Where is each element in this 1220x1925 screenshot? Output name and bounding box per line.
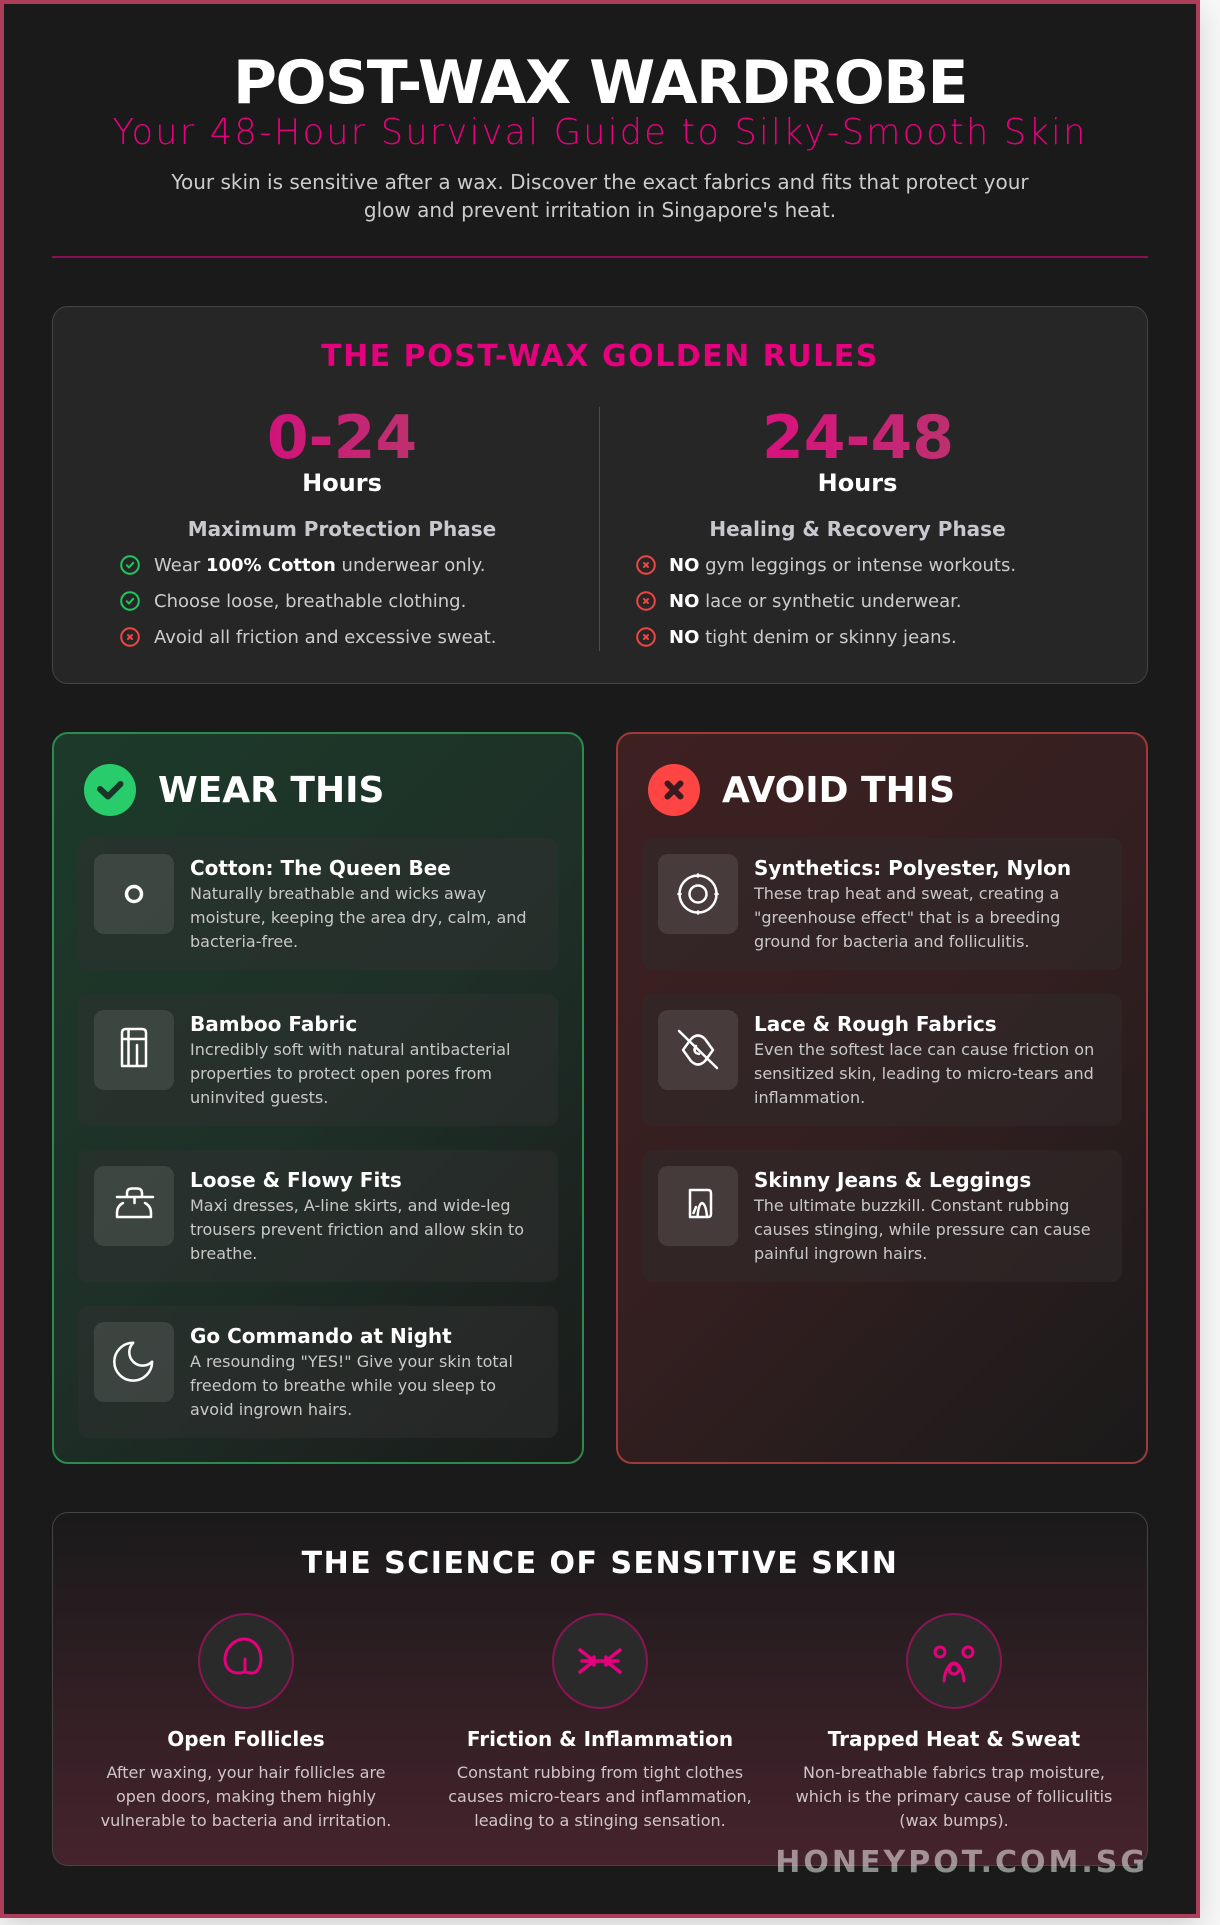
text: open follicles — [101, 1763, 391, 1830]
text: trapped heat: Non-breathable fabrics trap moisture, — [803, 1763, 1105, 1782]
rules list — [636, 554, 1016, 648]
column: trapped heat — [796, 1613, 1112, 1830]
text: synthetics — [754, 856, 1071, 951]
rule: cotton: Wear 100% Cotton underwear only. — [154, 554, 485, 576]
label: hours: Hours — [818, 469, 897, 497]
text: cotton: Cotton: The Queen Bee — [190, 856, 451, 880]
heading: wear this: WEAR THIS — [158, 770, 384, 811]
text: synthetics: These trap heat and sweat, creating a — [754, 884, 1059, 903]
text: open follicles: vulnerable to bacteria and irritation. — [101, 1811, 391, 1830]
panel: golden rules — [52, 306, 1148, 684]
text: skinny jeans: causes stinging, while pressure can cause — [754, 1220, 1091, 1239]
phase name: Healing & Recovery Phase — [709, 517, 1006, 541]
text: cotton: moisture, keeping the area dry, calm, and — [190, 908, 527, 927]
text: friction — [448, 1763, 752, 1830]
text: skinny jeans: painful ingrown hairs. — [754, 1244, 927, 1263]
text: loose fits: trousers prevent friction and allow skin to — [190, 1220, 524, 1239]
text: cotton: bacteria-free. — [190, 932, 298, 951]
column: 0-24 hours — [120, 403, 497, 648]
text: bamboo: Bamboo Fabric — [190, 1012, 357, 1036]
column: 24-48 hours — [636, 403, 1016, 648]
text: synthetics: ground for bacteria and folliculitis. — [754, 932, 1029, 951]
text: loose fits — [190, 1168, 524, 1263]
heading: science: THE SCIENCE OF SENSITIVE SKIN — [302, 1546, 898, 1581]
big number: 24-48 — [600, 403, 1116, 473]
text: bamboo: Incredibly soft with natural antibacterial — [190, 1040, 510, 1059]
text: trapped heat: (wax bumps). — [899, 1811, 1009, 1830]
text: trapped heat — [796, 1763, 1112, 1830]
big number: 0-24: 0-24 — [267, 403, 417, 473]
intro text: Your skin is sensitive after a wax. Discover the exact fabrics and fits that protect your — [171, 170, 1029, 194]
phase name: Maximum Protection Phase — [188, 517, 496, 541]
rule: no tight denim: NO tight denim or skinny jeans. — [669, 626, 957, 648]
text: commando — [190, 1324, 513, 1419]
text: commando: avoid ingrown hairs. — [190, 1400, 352, 1419]
text: skinny jeans — [754, 1168, 1091, 1263]
icon: bamboo — [94, 1010, 174, 1090]
text: loose fits: Maxi dresses, A-line skirts, and wide-leg — [190, 1196, 511, 1215]
text: loose fits: breathe. — [190, 1244, 257, 1263]
column: friction — [448, 1613, 752, 1830]
rule: no gym leggings: NO gym leggings or intense workouts. — [669, 554, 1016, 576]
text: open follicles: open doors, making them highly — [116, 1787, 376, 1806]
icon: red x — [648, 764, 700, 816]
heading: golden rules: THE POST-WAX GOLDEN RULES — [321, 339, 879, 374]
icon: cotton ring — [94, 854, 174, 934]
text: skinny jeans: Skinny Jeans & Leggings — [754, 1168, 1031, 1192]
column: open follicles — [101, 1613, 391, 1830]
text: bamboo — [190, 1012, 510, 1107]
text: lace — [754, 1012, 1094, 1107]
text: commando: A resounding "YES!" Give your skin total — [190, 1352, 513, 1371]
text: friction: causes micro-tears and inflammation, — [448, 1787, 752, 1806]
text: friction: leading to a stinging sensation. — [474, 1811, 726, 1830]
item: synthetics — [642, 838, 1122, 970]
text: cotton — [190, 856, 527, 951]
icon: friction — [552, 1613, 648, 1709]
subtitle: Your 48-Hour Survival Guide to Silky-Smooth Skin — [112, 112, 1088, 153]
big number: 0-24 — [84, 403, 600, 473]
item: commando — [78, 1306, 558, 1438]
icon: synthetics — [658, 854, 738, 934]
text: bamboo: uninvited guests. — [190, 1088, 328, 1107]
text: friction: Constant rubbing from tight clothes — [457, 1763, 743, 1782]
title: friction: Friction & Inflammation — [467, 1727, 733, 1751]
text: synthetics: Synthetics: Polyester, Nylon — [754, 856, 1071, 880]
text: bamboo: properties to protect open pores from — [190, 1064, 492, 1083]
text: synthetics: "greenhouse effect" that is a breeding — [754, 908, 1060, 927]
icon: moon — [94, 1322, 174, 1402]
panel: avoid this — [616, 732, 1148, 1464]
item: lace — [642, 994, 1122, 1126]
icon: follicle — [198, 1613, 294, 1709]
icon: trapped heat — [906, 1613, 1002, 1709]
rule: loose clothing: Choose loose, breathable clothing. — [154, 590, 466, 612]
icon: jeans — [658, 1166, 738, 1246]
intro text: glow and prevent irritation in Singapore's heat. — [364, 198, 836, 222]
text: loose fits: Loose & Flowy Fits — [190, 1168, 402, 1192]
text: commando: freedom to breathe while you sleep to — [190, 1376, 496, 1395]
watermark: HONEYPOT.COM.SG — [775, 1845, 1148, 1880]
item: bamboo — [78, 994, 558, 1126]
item: cotton — [78, 838, 558, 970]
panel: wear this — [52, 732, 584, 1464]
rule: no lace: NO lace or synthetic underwear. — [669, 590, 962, 612]
text: lace: sensitized skin, leading to micro-tears and — [754, 1064, 1094, 1083]
item: skinny jeans — [642, 1150, 1122, 1282]
rule: avoid friction: Avoid all friction and excessive sweat. — [154, 626, 497, 648]
heading: avoid this: AVOID THIS — [722, 770, 955, 811]
text: lace: Lace & Rough Fabrics — [754, 1012, 997, 1036]
text: lace: inflammation. — [754, 1088, 865, 1107]
label: hours: Hours — [302, 469, 382, 497]
text: trapped heat: which is the primary cause of folliculitis — [796, 1787, 1112, 1806]
icon: green check — [84, 764, 136, 816]
text: commando: Go Commando at Night — [190, 1324, 452, 1348]
title: POST-WAX WARDROBE — [233, 48, 967, 118]
title: open follicles: Open Follicles — [167, 1727, 325, 1751]
rules list — [120, 554, 497, 648]
icon: loose fit — [94, 1166, 174, 1246]
intro text — [171, 170, 1029, 222]
icon: lace — [658, 1010, 738, 1090]
text: cotton: Naturally breathable and wicks away — [190, 884, 486, 903]
item: loose fits — [78, 1150, 558, 1282]
title: trapped heat: Trapped Heat & Sweat — [828, 1727, 1080, 1751]
big number: 24-48: 24-48 — [762, 403, 954, 473]
text: lace: Even the softest lace can cause friction on — [754, 1040, 1094, 1059]
text: skinny jeans: The ultimate buzzkill. Constant rubbing — [754, 1196, 1069, 1215]
text: open follicles: After waxing, your hair follicles are — [106, 1763, 386, 1782]
panel: science of sensitive skin — [52, 1512, 1148, 1866]
